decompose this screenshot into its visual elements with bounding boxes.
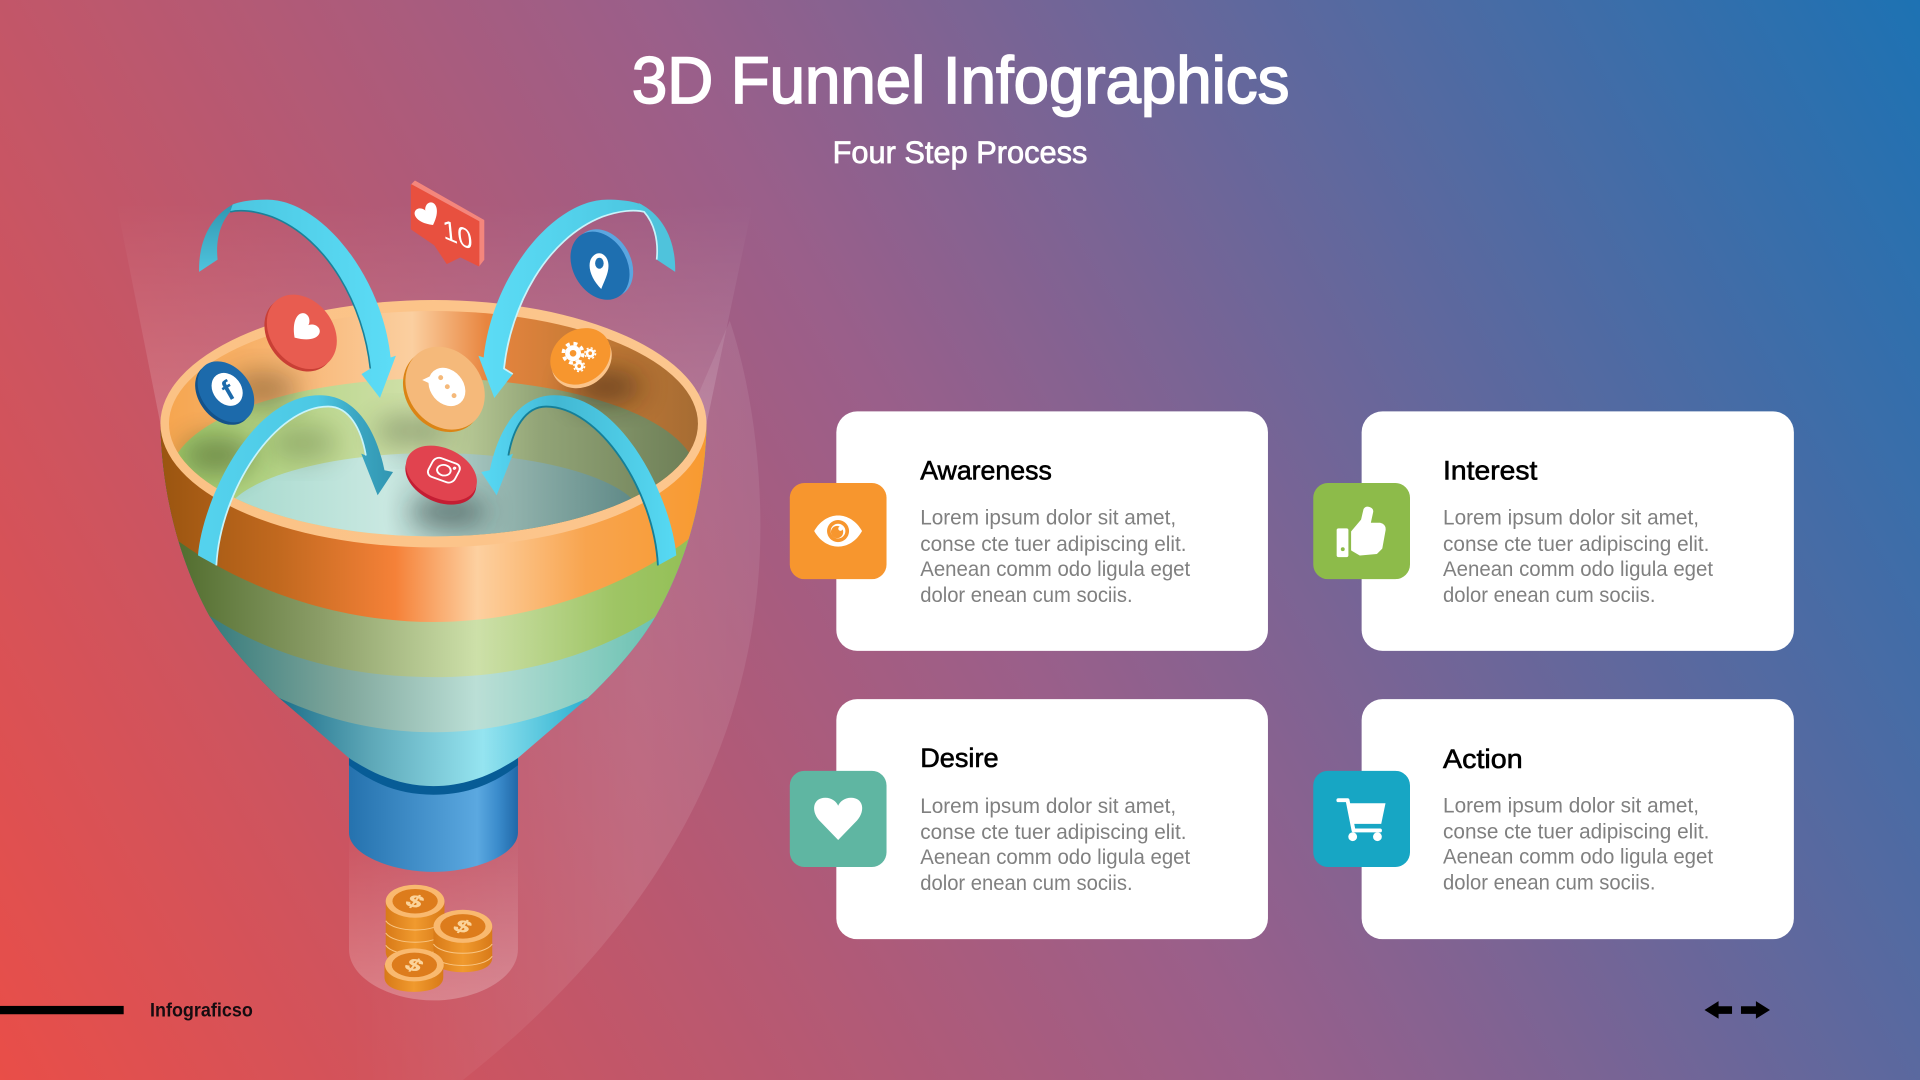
body: awareness: dolor enean cum sociis. xyxy=(920,583,1133,607)
body: interest: conse cte tuer adipiscing elit. xyxy=(1443,532,1709,556)
body: action: Lorem ipsum dolor sit amet, xyxy=(1443,793,1699,817)
icon: eye xyxy=(790,483,887,579)
body: awareness: Lorem ipsum dolor sit amet, xyxy=(920,506,1176,530)
arrow: upper left xyxy=(199,200,396,398)
coin: location pin xyxy=(559,219,645,310)
funnel blue spout xyxy=(349,758,518,872)
nav arrow: previous xyxy=(1704,1001,1732,1019)
panel: desire xyxy=(790,699,1268,939)
panel: interest xyxy=(1313,411,1794,651)
heading: desire: Desire xyxy=(920,743,999,773)
title: 3D Funnel Infographics xyxy=(632,44,1289,118)
panel: action xyxy=(1313,699,1794,939)
panel: awareness xyxy=(790,411,1268,651)
coin: camera xyxy=(396,435,486,515)
coin: like notification badge xyxy=(411,181,484,266)
heading: awareness: Awareness xyxy=(920,455,1052,485)
icon: heart xyxy=(790,771,887,867)
body: interest: dolor enean cum sociis. xyxy=(1443,583,1656,607)
dollar coin stack: back xyxy=(386,885,444,967)
coin: like notification badge: 10 xyxy=(441,213,474,257)
body: action xyxy=(1443,793,1713,894)
translucent background light beam xyxy=(116,202,760,1080)
arrow: lower left xyxy=(198,395,393,565)
coin: settings gears xyxy=(539,317,623,400)
body: interest xyxy=(1443,506,1713,607)
dollar coin stack: front xyxy=(384,948,444,992)
body: awareness: Aenean comm odo ligula eget xyxy=(920,557,1190,581)
dollar coin stack: front: $ xyxy=(401,954,428,976)
body: desire: Aenean comm odo ligula eget xyxy=(920,845,1190,869)
body: action: dolor enean cum sociis. xyxy=(1443,870,1656,894)
funnel output tube xyxy=(349,833,518,1000)
body: desire: conse cte tuer adipiscing elit. xyxy=(920,820,1187,844)
dollar coin stack: right: $ xyxy=(449,916,477,937)
subtitle: Four Step Process xyxy=(833,134,1087,170)
body: interest: Aenean comm odo ligula eget xyxy=(1443,557,1713,581)
body: action: conse cte tuer adipiscing elit. xyxy=(1443,819,1709,843)
coin: heart xyxy=(250,281,351,385)
arrow: upper right xyxy=(478,200,675,398)
heading: action: Action xyxy=(1443,744,1523,774)
funnel rim xyxy=(160,300,707,547)
body: desire: dolor enean cum sociis. xyxy=(920,871,1133,895)
nav arrow: next xyxy=(1741,1001,1770,1019)
body: desire: Lorem ipsum dolor sit amet, xyxy=(920,794,1176,818)
icon: thumbs up xyxy=(1313,483,1410,579)
body: desire xyxy=(920,794,1190,895)
arrow: lower right xyxy=(481,395,676,565)
funnel body bands xyxy=(160,424,706,786)
dollar coin stack: right xyxy=(433,910,492,972)
body: awareness: conse cte tuer adipiscing elit. xyxy=(920,532,1187,556)
funnel interior with liquid levels xyxy=(169,311,698,536)
coin: social f: f xyxy=(216,375,240,406)
body: interest: Lorem ipsum dolor sit amet, xyxy=(1443,506,1699,530)
coin: social f xyxy=(183,350,266,436)
dollar coin stack: back: $ xyxy=(401,891,429,912)
icon: shopping cart xyxy=(1313,771,1410,867)
footer brand bar xyxy=(0,1006,124,1014)
footer brand name: Infograficso xyxy=(150,1000,253,1021)
coin: chat bubble xyxy=(387,331,501,448)
body: awareness xyxy=(920,506,1190,607)
body: action: Aenean comm odo ligula eget xyxy=(1443,845,1713,869)
heading: interest: Interest xyxy=(1443,455,1538,485)
